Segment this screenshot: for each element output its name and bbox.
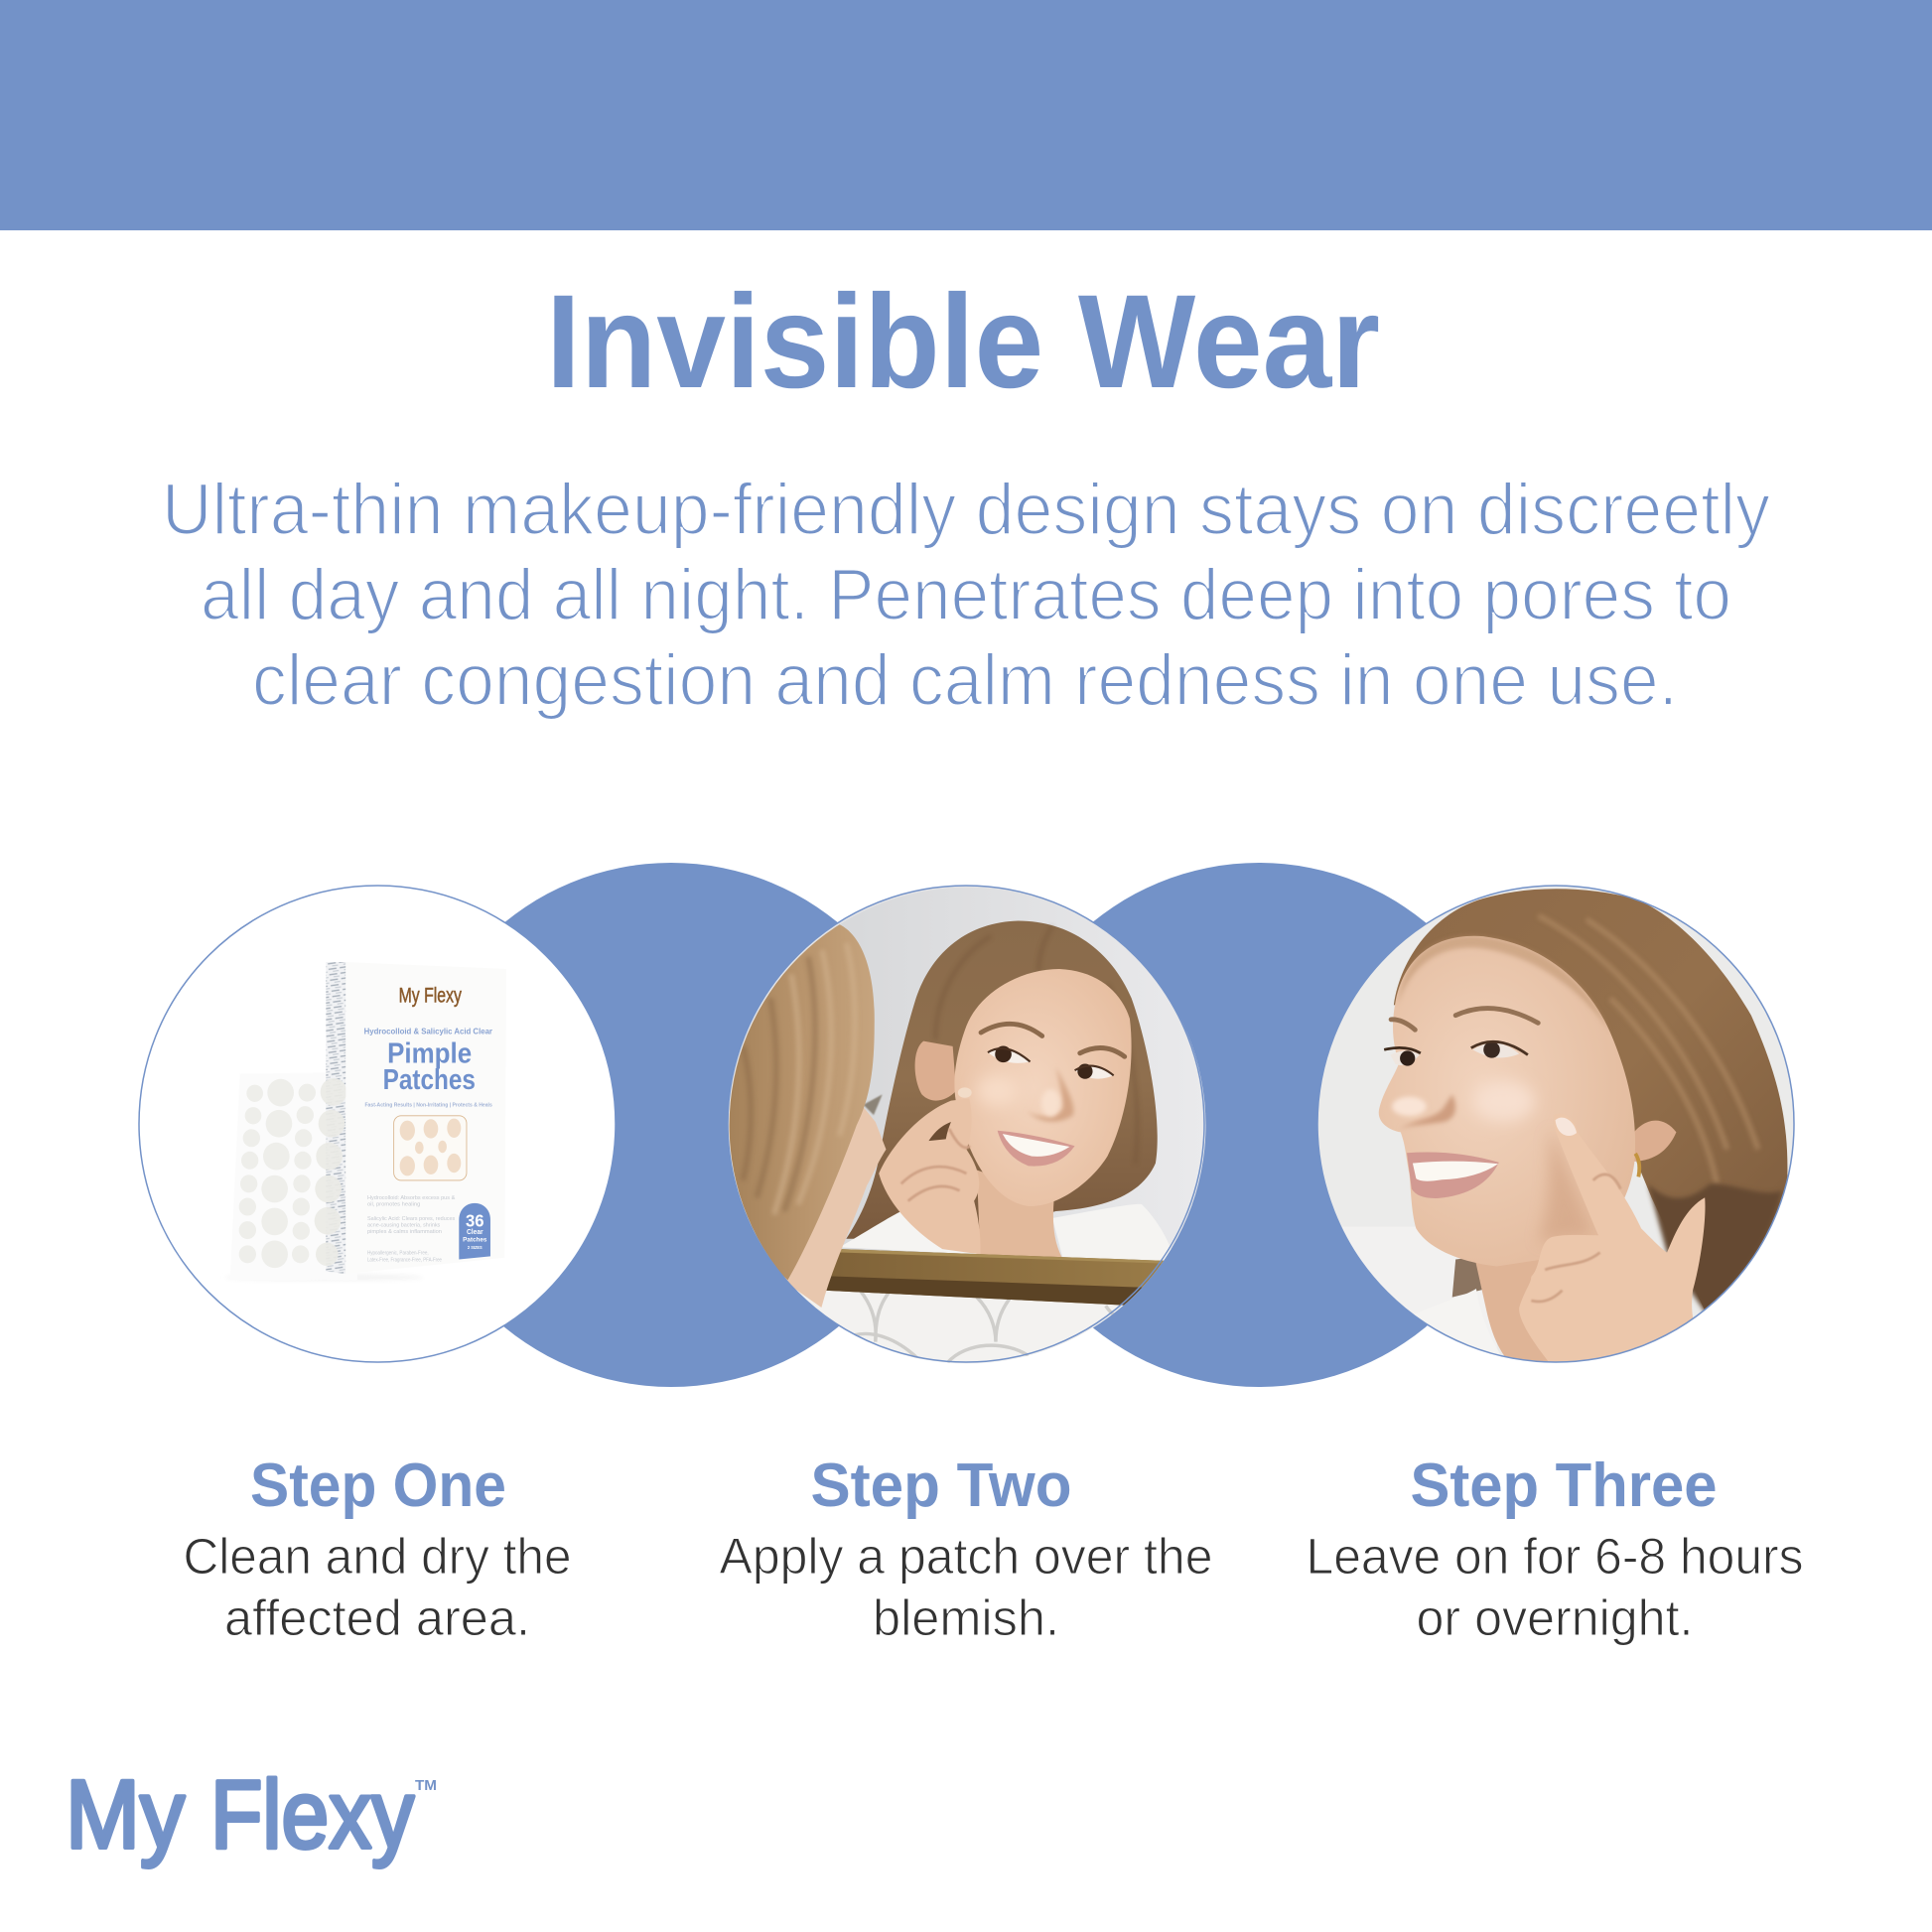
patch sheet and product box xyxy=(225,962,506,1281)
hand xyxy=(879,1098,981,1254)
ear xyxy=(915,1041,956,1101)
step one text: Clean and dry the xyxy=(183,1528,572,1585)
box count badge: 36 xyxy=(466,1211,484,1230)
brand logo: Flexy xyxy=(210,1760,414,1868)
hairline shading xyxy=(1398,935,1606,1025)
box claims: Fast-Acting Results | Non-Irritating | Protects & Heals xyxy=(364,1102,492,1108)
cheek highlights xyxy=(977,1075,1018,1106)
face xyxy=(1379,936,1635,1266)
step three caption xyxy=(1307,1451,1803,1646)
step two caption xyxy=(719,1451,1213,1646)
foreground lashes xyxy=(864,1094,883,1115)
step three text: Leave on for 6-8 hours xyxy=(1307,1528,1803,1585)
step three heading: Step Three xyxy=(1410,1451,1718,1520)
box patch illustration xyxy=(394,1116,467,1180)
box count badge: 2 SIZES xyxy=(468,1245,483,1250)
step one caption xyxy=(183,1451,572,1646)
box heading xyxy=(383,1037,476,1096)
shaded hair behind neck xyxy=(1648,1183,1782,1314)
step two circle outline xyxy=(728,886,1204,1362)
tile background xyxy=(1291,1227,1497,1364)
face xyxy=(954,969,1132,1206)
foreground cheek and neck xyxy=(784,1108,886,1308)
reflected shirt xyxy=(839,1204,1176,1265)
sheet patches over spine xyxy=(315,1078,346,1266)
foreground hair xyxy=(729,924,875,1281)
patch on fingertip xyxy=(958,1087,972,1098)
intro paragraph xyxy=(162,470,1770,721)
eyes xyxy=(1384,1041,1528,1066)
shirt xyxy=(1465,1289,1500,1354)
backing blue circle right xyxy=(997,863,1521,1387)
nose shading xyxy=(1392,1094,1455,1129)
box spine xyxy=(326,962,345,1274)
eyebrows xyxy=(981,1024,1125,1056)
box ingredient text: oil, promotes healing xyxy=(367,1201,420,1208)
step two text: blemish. xyxy=(873,1589,1059,1646)
step one text: affected area. xyxy=(224,1589,530,1646)
step one heading: Step One xyxy=(250,1451,506,1520)
eyebrows xyxy=(1391,1009,1538,1030)
intro paragraph: all day and all night. Penetrates deep into pores to xyxy=(201,555,1731,635)
box count badge xyxy=(459,1203,490,1260)
mirror frame xyxy=(822,1248,1176,1306)
box subtitle: Hydrocolloid & Salicylic Acid Clear xyxy=(364,1026,493,1035)
reflected hair xyxy=(846,921,1158,1239)
step two circle: woman applying patch in mirror xyxy=(729,885,1205,1364)
box ingredient text: Latex-Free, Fragrance-Free, PFA-Free xyxy=(367,1258,442,1264)
step three text xyxy=(1307,1528,1803,1646)
wall tiles xyxy=(796,1287,1143,1364)
step one circle: product box xyxy=(139,886,616,1362)
neck xyxy=(977,1171,1062,1258)
mirror background xyxy=(840,891,1205,1297)
brand logo: My xyxy=(66,1760,185,1868)
box logo: My Flexy xyxy=(399,984,462,1008)
patch sheet xyxy=(230,1072,357,1280)
backing blue circle left xyxy=(409,863,933,1387)
top colour band xyxy=(0,0,1932,230)
smile xyxy=(1407,1152,1499,1198)
box ingredient text xyxy=(367,1195,455,1264)
box count badge: Clear xyxy=(467,1229,483,1236)
box count badge: Patches xyxy=(463,1236,487,1244)
box ingredient text: Hydrocolloid: Absorbs excess pus & xyxy=(367,1195,455,1201)
hair xyxy=(1394,889,1787,1314)
hair under chin xyxy=(1451,1259,1482,1298)
box ingredient text: Hypoallergenic, Paraben-Free, xyxy=(367,1251,429,1257)
earring xyxy=(1635,1154,1639,1176)
brand logo: TM xyxy=(415,1777,437,1794)
eyes xyxy=(988,1046,1114,1079)
hand xyxy=(1519,1114,1706,1366)
finger shadow xyxy=(1539,1142,1589,1241)
cheek highlight xyxy=(1472,1080,1535,1122)
ear xyxy=(1634,1120,1676,1162)
brand logo xyxy=(66,1760,437,1868)
room background xyxy=(1291,854,1827,1390)
box shadow xyxy=(225,1274,424,1281)
box ingredient text: Salicylic Acid: Clears pores, reduces xyxy=(367,1216,455,1222)
neck xyxy=(1475,1234,1598,1362)
box front xyxy=(345,962,506,1274)
step three circle outline xyxy=(1317,886,1794,1362)
box ingredient text: pimples & calms inflammation xyxy=(367,1229,442,1235)
reflected hair strands xyxy=(939,923,1137,1100)
smile xyxy=(998,1131,1075,1167)
box heading: Pimple xyxy=(387,1037,472,1070)
step one text xyxy=(183,1528,572,1646)
title: Invisible Wear xyxy=(546,268,1380,416)
step two heading: Step Two xyxy=(810,1451,1072,1520)
box ingredient text: acne-causing bacteria, shrinks xyxy=(367,1223,440,1229)
hair strands xyxy=(1538,915,1758,1183)
intro paragraph: Ultra-thin makeup-friendly design stays on discreetly xyxy=(162,470,1770,550)
step three circle: woman pointing at patch xyxy=(1318,885,1795,1363)
step three text: or overnight. xyxy=(1416,1589,1694,1646)
intro paragraph: clear congestion and calm redness in one use. xyxy=(252,640,1678,721)
nose xyxy=(1026,1067,1073,1122)
box heading: Patches xyxy=(383,1063,476,1096)
step two text xyxy=(719,1528,1213,1646)
step two text: Apply a patch over the xyxy=(719,1528,1213,1585)
